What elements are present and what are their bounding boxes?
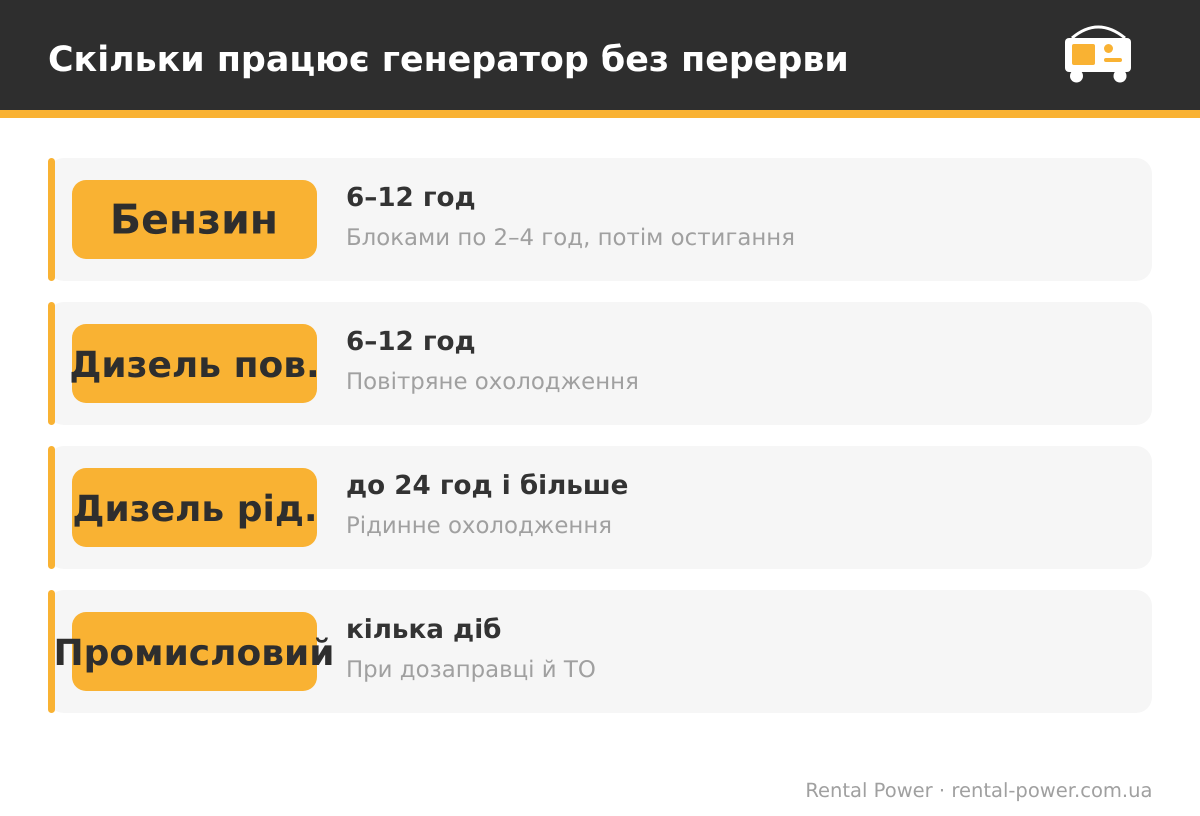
panel: industrial: При дозаправці й ТО (346, 657, 596, 683)
panel: air-cooled diesel (48, 302, 1152, 425)
panel: petrol: Бензин (110, 196, 278, 244)
panel: liquid-cooled diesel (48, 446, 1152, 569)
panel: liquid-cooled diesel: до 24 год і більше (346, 471, 628, 501)
icon: generator (1065, 27, 1131, 82)
panel: air-cooled diesel: 6–12 год (346, 327, 476, 357)
panel: liquid-cooled diesel: Дизель рід. (72, 489, 318, 530)
panel: air-cooled diesel: Повітряне охолодження (346, 369, 639, 395)
title: Скільки працює генератор без перерви (48, 40, 849, 80)
panel: petrol: 6–12 год (346, 183, 476, 213)
panel: air-cooled diesel: Дизель пов. (69, 345, 320, 386)
footer source: Rental Power · rental-power.com.ua (805, 779, 1152, 802)
panel: industrial (48, 590, 1152, 713)
panel: industrial: Промисловий (54, 633, 334, 674)
panel: petrol: Блоками по 2–4 год, потім остигання (346, 225, 795, 251)
panel: liquid-cooled diesel: Рідинне охолодження (346, 513, 612, 539)
panel: industrial: кілька діб (346, 615, 501, 645)
header banner (0, 0, 1200, 118)
panel: petrol (48, 158, 1152, 281)
